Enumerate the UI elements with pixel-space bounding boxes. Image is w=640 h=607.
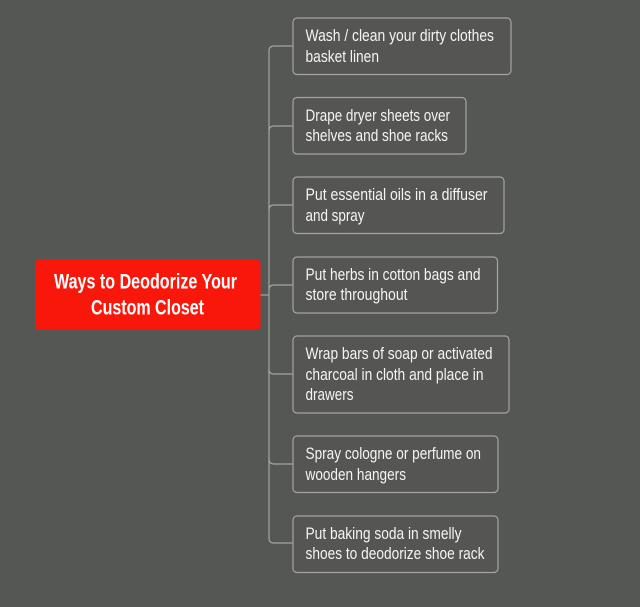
item 4 <box>293 257 498 313</box>
item 2: Drape dryer sheets over <box>306 106 450 125</box>
item 6 <box>293 436 498 492</box>
item 1: Wash / clean your dirty clothes <box>306 26 494 45</box>
connector tree <box>260 46 293 543</box>
item 1: basket linen <box>306 47 379 66</box>
item 7: Put baking soda in smelly <box>306 524 462 543</box>
item 4: store throughout <box>306 285 408 304</box>
item 2 <box>293 98 466 154</box>
item 2: shelves and shoe racks <box>306 126 448 145</box>
item 6: wooden hangers <box>305 465 406 484</box>
item 4: Put herbs in cotton bags and <box>306 265 480 284</box>
item 3: and spray <box>306 206 365 225</box>
item 6: Spray cologne or perfume on <box>306 444 481 463</box>
item 7: shoes to deodorize shoe rack <box>306 544 485 563</box>
central topic <box>35 260 260 330</box>
item 5: charcoal in cloth and place in <box>306 365 484 384</box>
item 5: drawers <box>306 385 354 404</box>
item 3 <box>293 177 504 234</box>
item 3: Put essential oils in a diffuser <box>306 185 488 204</box>
central topic: Custom Closet <box>91 296 204 320</box>
item 5 <box>293 336 509 413</box>
central topic: Ways to Deodorize Your <box>54 270 237 294</box>
item 5: Wrap bars of soap or activated <box>306 344 492 363</box>
item 1 <box>293 18 511 74</box>
item 7 <box>293 516 498 572</box>
